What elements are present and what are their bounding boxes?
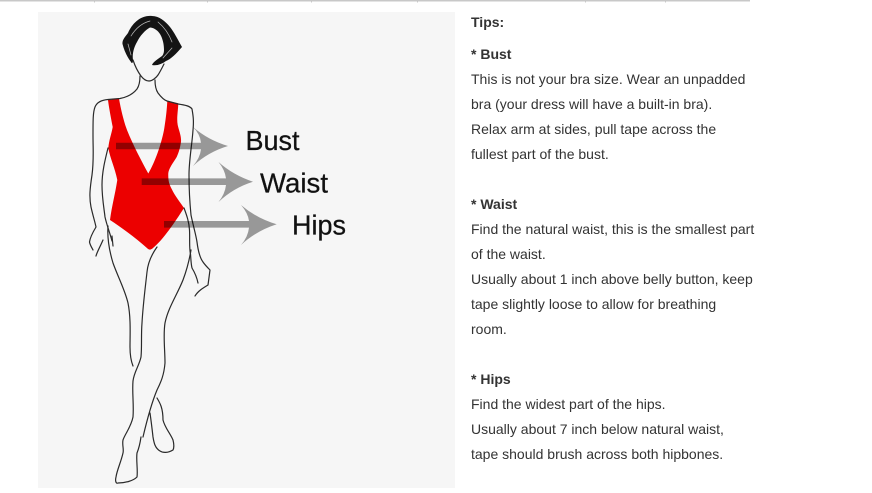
text block: bust: * Bust <box>471 46 511 62</box>
text block: waist: tape slightly loose to allow for breathing <box>471 296 716 312</box>
arrow: hips <box>164 205 277 245</box>
label: Hips: Hips <box>292 210 346 240</box>
panel: measurement illustration <box>38 12 455 488</box>
arrow: waist <box>142 162 253 202</box>
label: Waist: Waist <box>260 168 328 198</box>
text block: waist: Usually about 1 inch above belly button, keep <box>471 271 753 287</box>
red swimsuit <box>108 99 184 250</box>
figure outline <box>90 60 210 483</box>
text block: waist: * Waist <box>471 196 517 212</box>
text block: hips: tape should brush across both hipbones. <box>471 446 723 462</box>
arrow: bust <box>116 127 228 166</box>
text block: bust <box>471 46 745 162</box>
heading: tips: Tips: <box>471 14 504 30</box>
hair <box>122 16 182 65</box>
text block: bust: This is not your bra size. Wear an unpadded <box>471 71 745 87</box>
text block: waist: Find the natural waist, this is the smallest part <box>471 221 754 237</box>
text block: bust: fullest part of the bust. <box>471 146 609 162</box>
text block: hips <box>471 371 724 462</box>
text block: waist: room. <box>471 321 507 337</box>
text block: bust: Relax arm at sides, pull tape across the <box>471 121 716 137</box>
text block: waist: of the waist. <box>471 246 546 262</box>
text block: hips: * Hips <box>471 371 511 387</box>
text block: bust: bra (your dress will have a built-in bra). <box>471 96 712 112</box>
text block: waist <box>471 196 754 337</box>
label: Bust: Bust <box>246 125 300 156</box>
text block: hips: Usually about 7 inch below natural waist, <box>471 421 724 437</box>
text block: hips: Find the widest part of the hips. <box>471 396 666 412</box>
